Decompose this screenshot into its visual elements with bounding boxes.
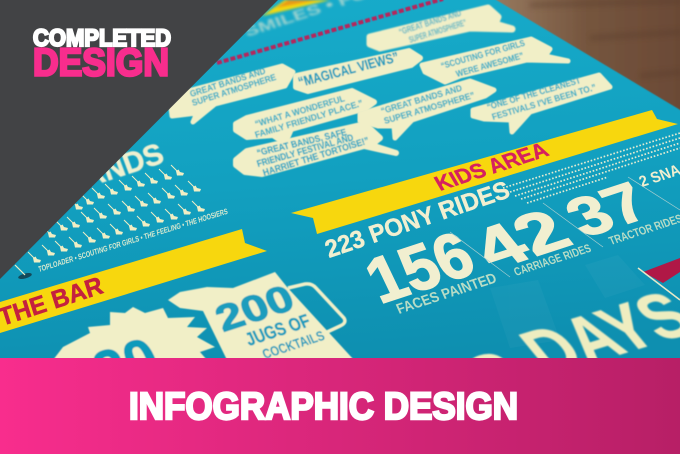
speech bubble: great bands and super atmosphere, centre: “GREAT BANDS AND bbox=[380, 83, 464, 116]
stat: 3 days: 3 bbox=[450, 337, 543, 414]
speech bubble: scouting for girls: “SCOUTING FOR GIRLS bbox=[440, 38, 526, 71]
speech bubble: top: SUPER ATMOSPHERE” bbox=[408, 17, 468, 45]
speech bubble: scouting for girls bbox=[422, 38, 568, 82]
speech bubble: great bands, safe friendly festival: “GREAT BANDS, SAFE bbox=[256, 127, 348, 159]
icon grid: guitars bbox=[28, 165, 205, 262]
wooden table bbox=[493, 0, 680, 111]
speech bubble: great bands, safe friendly festival bbox=[236, 124, 396, 179]
logo bbox=[33, 25, 171, 84]
speech bubble: great bands and super atmosphere bbox=[170, 66, 293, 122]
banner: kids area bbox=[291, 110, 678, 234]
speech bubble: top: “GREAT BANDS AND bbox=[398, 8, 463, 37]
speech bubble: one of the cleanest festivals: FESTIVALS I'VE BEEN TO.” bbox=[491, 82, 597, 122]
speech bubble: great bands and super atmosphere, centre: SUPER ATMOSPHERE” bbox=[383, 90, 476, 126]
speech bubble: great bands and super atmosphere: GREAT BANDS AND bbox=[189, 66, 267, 99]
halftone dot band bbox=[503, 133, 680, 203]
speech bubble: great bands and super atmosphere: SUPER ATMOSPHERE bbox=[191, 72, 277, 108]
footer title: INFOGRAPHIC DESIGN bbox=[129, 386, 518, 428]
stat: 37 tractor rides: 37 bbox=[553, 171, 662, 249]
stitched divider line bbox=[217, 0, 443, 63]
jug of cocktails: 200 bbox=[209, 278, 301, 340]
speech bubble: magical views: “MAGICAL VIEWS” bbox=[296, 49, 401, 90]
stat dividers bbox=[450, 177, 680, 277]
speech bubble: what a wonderful family friendly place: “WHAT A WONDERFUL bbox=[254, 93, 346, 129]
top banner remnant bbox=[262, 0, 330, 16]
speech bubble: one of the cleanest festivals: “ONE OF THE CLEANEST bbox=[486, 75, 582, 112]
stat: 3 days bbox=[450, 278, 680, 414]
logo: COMPLETED bbox=[33, 25, 171, 52]
speech bubble: one of the cleanest festivals bbox=[473, 75, 610, 132]
dark corner panel bbox=[0, 0, 278, 279]
faint lighter panels bbox=[490, 255, 645, 348]
stat: 156 faces painted: 156 bbox=[354, 218, 485, 317]
banner: kids area: KIDS AREA bbox=[430, 138, 553, 195]
footer bar bbox=[0, 358, 680, 454]
speech bubble: great bands, safe friendly festival: FRIENDLY FESTIVAL AND bbox=[256, 132, 355, 170]
heading: bands: BANDS bbox=[58, 137, 168, 201]
speech bubble: great bands and super atmosphere, centre bbox=[360, 81, 494, 138]
banner: the bar bbox=[0, 229, 267, 333]
stat: 156 faces painted: FACES PAINTED bbox=[394, 271, 500, 318]
stat: 42 carriage rides: CARRIAGE RIDES bbox=[512, 241, 593, 279]
stat: 42 carriage rides: 42 bbox=[456, 197, 585, 281]
icon: fallen guitar with shadow bbox=[15, 265, 32, 280]
speech bubble: scouting for girls: WERE AWESOME” bbox=[455, 50, 525, 79]
sun badge bbox=[53, 307, 215, 404]
poster background bbox=[0, 0, 680, 360]
sun badge: 20 bbox=[83, 327, 169, 404]
stat: 223 pony rides: 223 PONY RIDES bbox=[321, 176, 514, 264]
speech bubble: top bbox=[370, 8, 512, 48]
jug of cocktails bbox=[168, 272, 354, 362]
logo: DESIGN bbox=[33, 42, 169, 84]
jug of cocktails: JUGS OF bbox=[242, 311, 314, 351]
speech bubble: what a wonderful family friendly place: FAMILY FRIENDLY PLACE.” bbox=[254, 98, 364, 140]
caption: band names: TOPLOADER • SCOUTING FOR GIRLS • THE FEELING • THE HOOSIERS bbox=[38, 207, 229, 274]
jug of cocktails: COCKTAILS bbox=[260, 327, 327, 362]
speech bubble: great bands, safe friendly festival: HARRIET THE TORTOISE!” bbox=[262, 135, 371, 179]
flag bbox=[638, 258, 680, 300]
